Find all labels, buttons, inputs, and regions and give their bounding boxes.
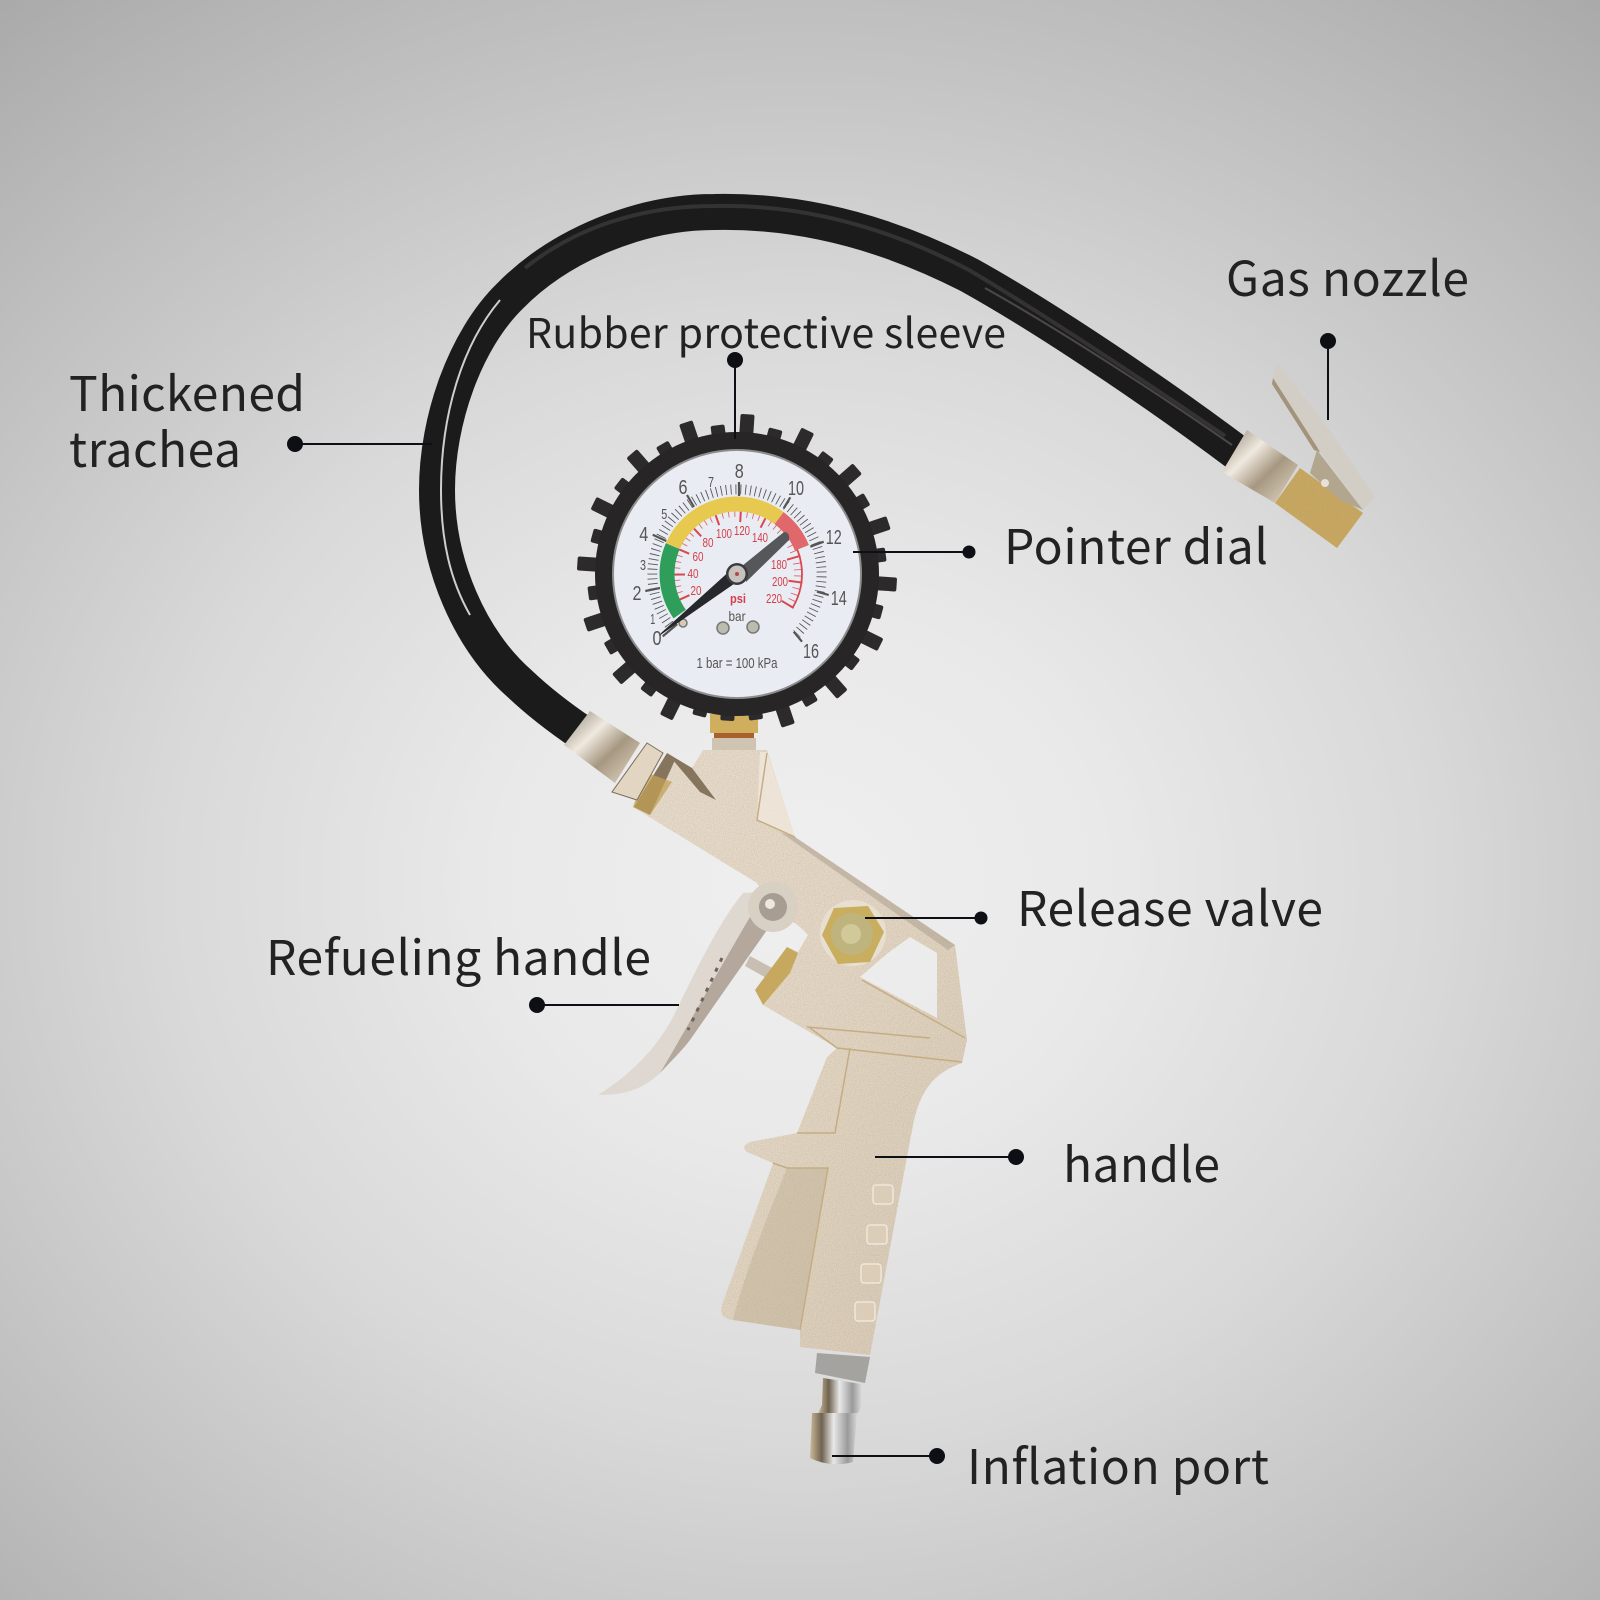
brass block [1275,468,1363,548]
bar numbers: 2 [632,583,642,605]
callout: Pointer dial: Pointer dial [1004,508,1268,578]
bar numbers: 0 [652,628,662,650]
callout: Gas nozzle [1226,240,1469,420]
psi numbers: 60 [692,549,704,564]
trigger [598,882,798,1095]
release valve [820,900,886,966]
callout: Gas nozzle: Gas nozzle [1226,240,1469,310]
grip dimples [688,958,722,1030]
bar numbers: 5 [661,506,667,523]
callout: Rubber protective sleeve [526,300,1006,439]
callout: Inflation port: Inflation port [967,1428,1269,1498]
callout: Inflation port [832,1428,1269,1498]
neck and tube shading [634,753,716,815]
bar numbers: 6 [678,477,688,499]
dial captions [696,608,778,672]
bar numbers: 14 [831,588,847,610]
lever plate [1273,363,1375,510]
bar numbers [632,461,847,663]
psi numbers: 20 [690,583,702,598]
bar scale ticks [645,482,829,642]
push rod [745,956,776,980]
hose ferrule [564,711,663,800]
dial captions: 1 bar = 100 kPa [696,655,778,672]
rubber ring and bezel [595,432,879,716]
bar numbers: 12 [826,527,842,549]
callout: Rubber protective sleeve: Rubber protective sleeve [526,300,1006,360]
grip panel [733,1168,828,1330]
psi numbers: 220 [766,591,782,606]
bar numbers: 10 [788,478,804,500]
bar numbers: 3 [640,557,646,574]
callout: Pointer dial [853,508,1268,578]
psi numbers: psi [730,591,746,606]
gauge stem [710,714,758,752]
callout: Release valve: Release valve [1017,870,1323,940]
crimp ferrule [1222,430,1298,503]
callout: Refueling handle [266,919,679,1013]
bar numbers: 7 [708,474,714,491]
callout: Thickened trachea: Thickened [69,355,305,425]
callout: handle: handle [1063,1126,1220,1196]
psi numbers [688,523,788,606]
gun body [633,750,967,1355]
air hose [437,206,1240,733]
brass adjuster nut [755,947,798,1005]
needle [659,532,789,636]
callout: Refueling handle: Refueling handle [266,919,651,989]
psi numbers: 200 [772,574,788,589]
bar numbers: 4 [639,524,648,546]
psi numbers: 180 [771,557,787,572]
gas nozzle [1222,363,1375,548]
psi numbers: 40 [688,566,698,581]
psi numbers: 100 [716,526,732,541]
inflation port fitting [810,1353,870,1464]
dial captions: bar [728,608,746,624]
psi numbers: 80 [702,535,714,550]
callout: Thickened trachea [69,355,432,481]
callout: Release valve [865,870,1323,940]
coloured pressure bands [667,504,802,614]
dial face [614,451,860,697]
bar numbers: 8 [735,461,744,483]
callout: Thickened trachea: trachea [69,411,241,481]
rubber sleeve teeth [577,414,897,728]
grip panel lines [757,753,965,1330]
bar numbers: 1 [650,611,655,628]
dial screws [679,619,759,634]
psi numbers: 120 [734,523,750,538]
callout: handle [875,1126,1220,1196]
blade [598,890,790,1095]
psi numbers: 140 [752,530,768,545]
bar numbers: 16 [803,641,819,663]
grip ribs [855,1185,893,1321]
pivot head [748,882,798,932]
hex nut [612,743,663,800]
pressure gauge [577,414,897,728]
psi scale ticks [671,508,802,608]
